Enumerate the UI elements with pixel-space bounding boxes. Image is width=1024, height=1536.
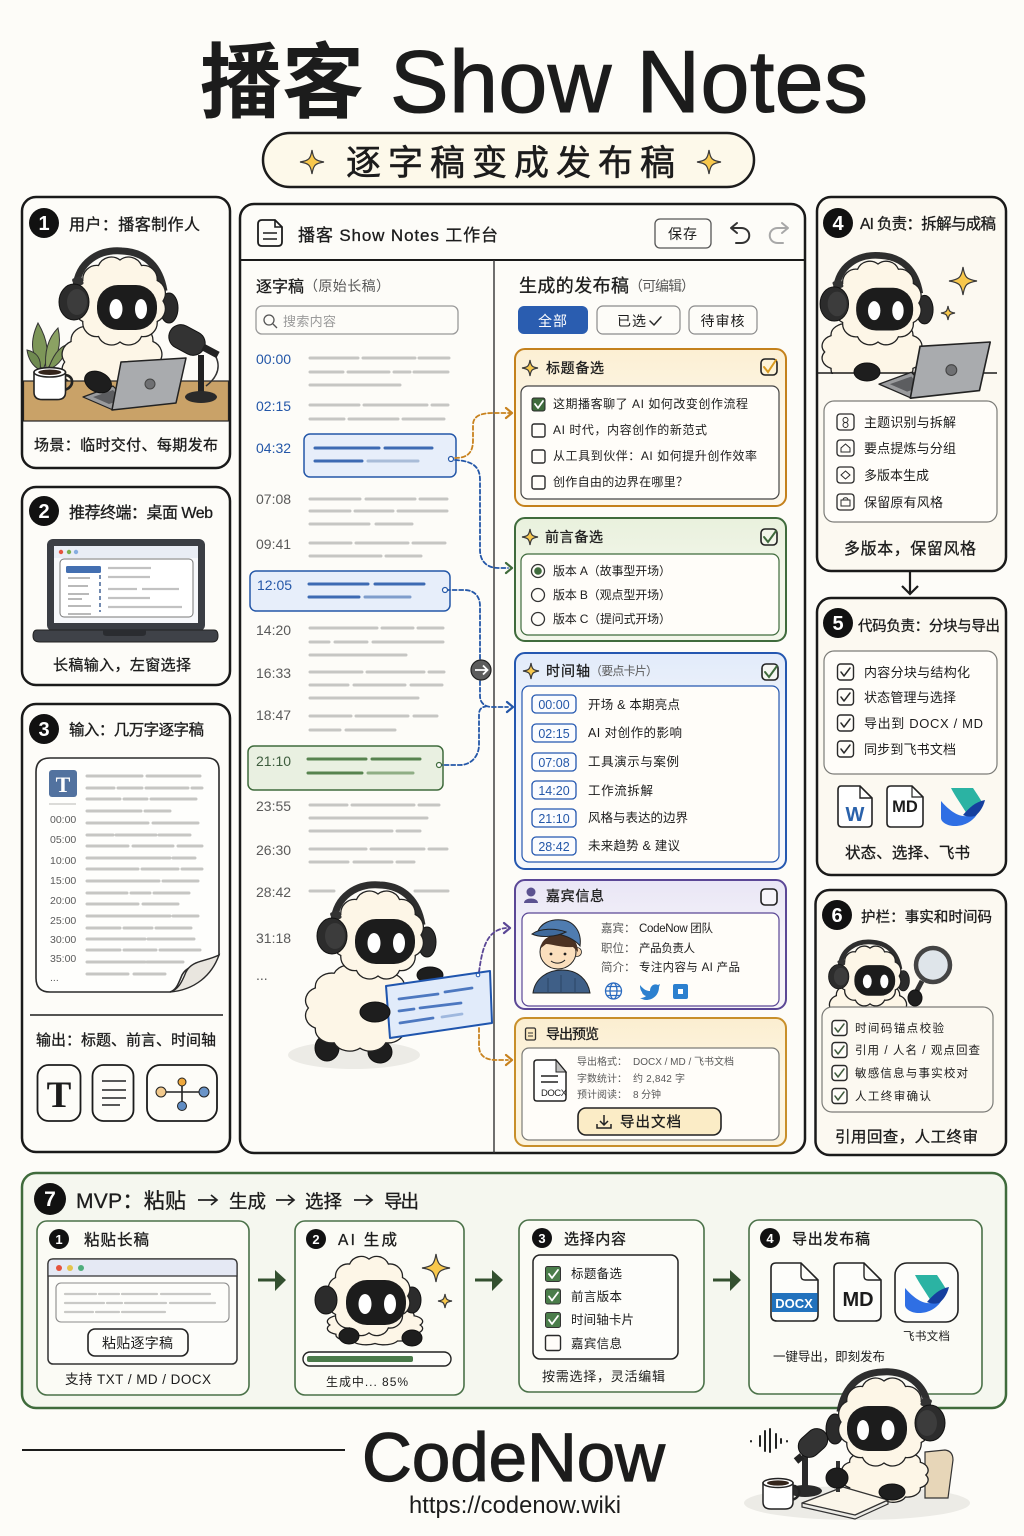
card: timeline key points: 工具演示与案例 xyxy=(588,754,679,769)
icon: plant xyxy=(27,323,66,370)
icon: timeline nodes xyxy=(147,1065,217,1121)
card: guest info: 嘉宾信息 xyxy=(546,888,604,904)
panel 6: guardrails: 6 xyxy=(831,905,843,927)
checklist: 引用 / 人名 / 观点回查 xyxy=(855,1043,980,1057)
panel 6: guardrails xyxy=(816,890,1006,1155)
icon: coffee cup xyxy=(34,368,72,400)
card: export preview: 预计阅读： xyxy=(577,1088,627,1101)
transcript document: 15:00 xyxy=(50,875,76,887)
task list: 要点提炼与分组 xyxy=(864,441,956,456)
checklist: 时间码锚点校验 xyxy=(855,1021,944,1035)
icon: Markdown file xyxy=(887,786,923,827)
card: intro candidates: 版本 B（观点型开场） xyxy=(553,588,671,602)
generated drafts heading xyxy=(519,276,695,296)
icon: export clipboard xyxy=(526,1028,536,1040)
subtitle pill: 逐字稿变成发布稿 xyxy=(346,144,675,183)
panel 3: input and output: 输出：标题、前言、时间轴 xyxy=(36,1032,216,1049)
card: title candidates xyxy=(515,349,786,506)
icon: title T: T xyxy=(47,1075,72,1116)
sparkles xyxy=(422,1254,452,1308)
step 1: paste: 1 xyxy=(55,1232,63,1247)
panel 5: code responsibilities: 状态、选择、飞书 xyxy=(845,844,970,862)
connector: title candidates xyxy=(455,408,512,458)
connector: export xyxy=(479,1028,512,1065)
step 3: select: 3 xyxy=(538,1231,546,1246)
panel 6: guardrails: 护栏：事实和时间码 xyxy=(861,909,992,926)
export button: 导出文档 xyxy=(620,1114,681,1131)
card: guest info: 简介： xyxy=(601,960,636,974)
card: export preview: 8 分钟 xyxy=(633,1088,661,1101)
filter tabs: 全部 xyxy=(538,313,568,329)
step 2: AI generate xyxy=(295,1221,464,1395)
card: timeline key points: 00:00 xyxy=(538,698,570,712)
step 2: AI generate: AI 生成 xyxy=(338,1231,397,1249)
time codes: 04:32 xyxy=(256,440,291,456)
card: title candidates: 创作自由的边界在哪里？ xyxy=(553,474,688,489)
step 2: AI generate: 生成中... 85% xyxy=(326,1374,408,1389)
icon: coffee cup xyxy=(763,1478,799,1509)
pen and paws xyxy=(826,1461,905,1500)
transcript document: 10:00 xyxy=(50,855,76,867)
checklist xyxy=(822,1007,993,1112)
time codes: 09:41 xyxy=(256,536,291,552)
card: timeline key points xyxy=(515,653,786,869)
transcript document: 25:00 xyxy=(50,915,76,927)
checklist: 状态管理与选择 xyxy=(864,690,956,705)
sheep body xyxy=(62,318,162,406)
card: guest info: 嘉宾： xyxy=(601,921,636,935)
step 4: export: 导出发布稿 xyxy=(792,1231,870,1248)
task list: 保留原有风格 xyxy=(864,495,943,510)
icon: title T xyxy=(38,1065,80,1121)
browser window: 粘贴逐字稿 xyxy=(102,1335,173,1351)
card: timeline key points: 风格与表达的边界 xyxy=(588,810,688,825)
checklist: 导出到 DOCX / MD xyxy=(864,716,983,731)
workspace header: 保存 xyxy=(668,226,698,242)
panel 2: device: 2 xyxy=(38,501,50,523)
browser window xyxy=(48,1259,237,1364)
transcript document: T xyxy=(56,772,71,797)
task list xyxy=(824,401,997,522)
footer sheep podcaster xyxy=(744,1372,970,1520)
transcript document: 35:00 xyxy=(50,953,76,965)
card: timeline key points: AI 对创作的影响 xyxy=(588,725,682,740)
highlight segment 12:05: 12:05 xyxy=(257,577,292,593)
task list: 多版本生成 xyxy=(864,468,929,483)
step 3: select xyxy=(519,1220,704,1392)
footer logo: CodeNow xyxy=(362,1419,665,1496)
footer rule xyxy=(22,1449,345,1451)
panel 4: AI responsibilities: 多版本，保留风格 xyxy=(844,540,976,558)
time codes: 00:00 xyxy=(256,351,291,367)
transcript document: 05:00 xyxy=(50,834,76,846)
time codes: 16:33 xyxy=(256,665,291,681)
card: guest info: 产品负责人 xyxy=(639,941,696,955)
title: Show Notes xyxy=(390,32,868,131)
connector: guest xyxy=(479,923,510,972)
card: guest info xyxy=(515,880,786,1009)
step 1: paste: 粘贴长稿 xyxy=(84,1231,149,1249)
flow heading: 生成 xyxy=(229,1191,266,1212)
panel 2: device: 推荐终端：桌面 Web xyxy=(69,504,213,522)
panel 1: user: 1 xyxy=(38,213,50,235)
flow heading: 选择 xyxy=(305,1191,342,1212)
step 4: export: 一键导出，即刻发布 xyxy=(773,1349,885,1364)
transcript column: （原始长稿） xyxy=(304,278,390,294)
step 4: export xyxy=(749,1220,982,1394)
export button xyxy=(578,1108,721,1135)
checklist: 敏感信息与事实校对 xyxy=(855,1066,968,1080)
panel 2: device xyxy=(22,487,230,685)
card: timeline key points: （要点卡片） xyxy=(590,664,658,678)
sheep paw xyxy=(81,367,115,397)
card: guest info: CodeNow 团队 xyxy=(639,921,714,935)
transcript lines xyxy=(310,358,449,891)
card: export preview: 约 2,842 字 xyxy=(633,1072,685,1085)
icon: square link xyxy=(673,984,688,999)
panel 3: input and output: 3 xyxy=(38,719,50,741)
transcript document: ... xyxy=(50,972,59,984)
step 3: select: 前言版本 xyxy=(571,1289,622,1304)
card: timeline key points: 02:15 xyxy=(538,727,570,741)
step 1: paste xyxy=(37,1221,249,1395)
laptop xyxy=(83,358,186,410)
card: intro candidates xyxy=(515,518,786,641)
panel 1: user: 用户：播客制作人 xyxy=(69,216,200,234)
checklist: 内容分块与结构化 xyxy=(864,665,970,680)
search box: 搜索内容 xyxy=(283,314,336,329)
card: timeline key points: 工作流拆解 xyxy=(588,783,653,798)
panel 5: code responsibilities: 代码负责：分块与导出 xyxy=(858,618,1000,635)
arrow: panel 4 to panel 5 xyxy=(902,572,918,594)
main workspace panel xyxy=(240,204,805,1153)
checklist: 同步到飞书文档 xyxy=(864,742,956,757)
card: title candidates: 这期播客聊了 AI 如何改变创作流程 xyxy=(553,396,748,411)
time codes: 18:47 xyxy=(256,707,291,723)
microphone xyxy=(165,320,218,403)
connector: timeline xyxy=(436,588,513,768)
icon: person xyxy=(524,888,538,903)
highlight segment 21:10 xyxy=(248,746,443,790)
icon: MD file: MD xyxy=(842,1289,874,1311)
transcript column xyxy=(248,278,458,983)
flow heading: MVP：粘贴 xyxy=(76,1190,186,1213)
chair xyxy=(925,1450,953,1498)
step 3: select: 时间轴卡片 xyxy=(571,1312,634,1327)
time codes xyxy=(256,351,291,983)
icon: DOCX file xyxy=(771,1263,818,1321)
highlight segment 04:32 xyxy=(304,434,456,477)
time codes: 23:55 xyxy=(256,798,291,814)
panel 1: user: 场景：临时交付、每期发布 xyxy=(34,436,218,454)
time codes: 28:42 xyxy=(256,884,291,900)
arrow xyxy=(475,1270,503,1291)
panel 6: guardrails: 引用回查，人工终审 xyxy=(835,1128,978,1146)
card: guest info: 专注内容与 AI 产品 xyxy=(639,960,740,974)
filter tabs: 待审核 xyxy=(700,313,746,329)
panel 3: input and output: 输入：几万字逐字稿 xyxy=(69,721,204,739)
workspace header xyxy=(240,219,805,260)
highlight segment 21:10: 21:10 xyxy=(256,753,291,769)
notebook xyxy=(802,1487,888,1519)
generated drafts heading: （可编辑） xyxy=(629,278,695,294)
card: export preview xyxy=(515,1018,786,1146)
arrow xyxy=(258,1270,286,1291)
icon: MD file xyxy=(834,1263,881,1321)
footer logo: https://codenow.wiki xyxy=(409,1493,621,1519)
search box xyxy=(256,306,458,334)
icon: Word file xyxy=(838,786,872,827)
icon: Markdown file: MD xyxy=(892,798,918,816)
card: timeline key points: 28:42 xyxy=(538,840,570,854)
card: guest info: 职位： xyxy=(601,941,636,955)
step 1: paste: 支持 TXT / MD / DOCX xyxy=(65,1372,211,1387)
panel 1: user xyxy=(22,197,230,468)
card: timeline key points: 21:10 xyxy=(538,812,570,826)
icon: globe xyxy=(606,983,622,999)
flow heading xyxy=(76,1190,419,1213)
card: timeline key points: 时间轴 xyxy=(546,663,590,679)
card: export preview: DOCX / MD / 飞书文档 xyxy=(633,1055,734,1068)
sparkles xyxy=(941,267,977,320)
transcript document: 00:00 xyxy=(50,814,76,826)
icon: text lines xyxy=(92,1065,134,1121)
progress bar xyxy=(303,1352,451,1366)
time codes: 31:18 xyxy=(256,930,291,946)
sheep head with headphones xyxy=(59,251,178,345)
time codes: 07:08 xyxy=(256,491,291,507)
card: export preview: 导出预览 xyxy=(546,1026,599,1042)
card: title candidates: 标题备选 xyxy=(546,360,604,376)
sheep working xyxy=(315,1256,423,1346)
card: export preview: 导出格式： xyxy=(577,1055,627,1068)
card: timeline key points: 开场 & 本期亮点 xyxy=(588,697,680,712)
panel 2: device: 长稿输入，左窗选择 xyxy=(53,656,191,674)
panel 3: input and output xyxy=(22,704,230,1152)
microphone xyxy=(788,1424,832,1497)
transcript document: 30:00 xyxy=(50,934,76,946)
sheep at laptop xyxy=(818,255,997,398)
panel 7: MVP flow xyxy=(22,1173,1006,1408)
task list: 主题识别与拆解 xyxy=(864,415,956,430)
filter tabs: 已选 xyxy=(617,313,647,329)
panel 5: code responsibilities xyxy=(817,598,1006,875)
panel 7: MVP flow: 7 xyxy=(44,1188,56,1211)
title: 播客 xyxy=(200,38,364,129)
icon: DOCX file xyxy=(534,1060,568,1101)
step 3: select: 嘉宾信息 xyxy=(571,1336,622,1351)
icon: twitter xyxy=(640,984,660,1000)
step 2: AI generate: 2 xyxy=(312,1232,320,1247)
highlight segment 12:05 xyxy=(250,571,450,611)
panel 5: code responsibilities: 5 xyxy=(832,613,844,635)
sheep holding note card xyxy=(288,885,492,1069)
icon: Feishu logo xyxy=(941,788,985,826)
flow heading: 导出 xyxy=(384,1191,419,1212)
checklist xyxy=(824,651,997,774)
card: timeline key points: 07:08 xyxy=(538,756,570,770)
transcript column: 逐字稿 xyxy=(256,278,304,296)
desk xyxy=(24,381,228,421)
subtitle pill xyxy=(263,133,754,187)
step 4: export: 飞书文档 xyxy=(903,1329,950,1343)
step 3: select: 按需选择，灵活编辑 xyxy=(542,1369,665,1384)
card: title candidates: AI 时代，内容创作的新范式 xyxy=(553,422,707,437)
step 3: select: 标题备选 xyxy=(571,1267,622,1281)
time codes: 14:20 xyxy=(256,622,291,638)
transcript document: 20:00 xyxy=(50,895,76,907)
laptop mockup xyxy=(33,539,218,642)
card: timeline key points: 14:20 xyxy=(538,784,570,798)
note card xyxy=(386,971,492,1038)
generated drafts heading: 生成的发布稿 xyxy=(519,276,629,296)
panel 4: AI responsibilities xyxy=(817,197,1006,571)
workspace header: 播客 Show Notes 工作台 xyxy=(298,226,498,245)
panel 4: AI responsibilities: 4 xyxy=(832,213,844,235)
time codes: ... xyxy=(256,967,268,983)
card: intro candidates: 版本 C（提问式开场） xyxy=(553,611,671,626)
time codes: 26:30 xyxy=(256,842,291,858)
arrow xyxy=(713,1270,741,1291)
card: intro candidates: 版本 A（故事型开场） xyxy=(553,563,671,578)
card: timeline key points: 未来趋势 & 建议 xyxy=(588,838,680,853)
connector: intro candidates xyxy=(448,456,512,573)
icon: Word file: W xyxy=(846,804,865,826)
guest avatar xyxy=(532,920,590,993)
sound wave xyxy=(751,1429,787,1452)
icon: Feishu doc xyxy=(895,1263,958,1322)
card: title candidates: 从工具到伙伴：AI 如何提升创作效率 xyxy=(553,448,757,463)
panel 4: AI responsibilities: AI 负责：拆解与成稿 xyxy=(860,215,996,233)
step 4: export: 4 xyxy=(766,1231,774,1246)
icon: DOCX file: DOCX xyxy=(775,1296,813,1311)
card: intro candidates: 前言备选 xyxy=(545,529,603,545)
transcript document xyxy=(36,758,219,992)
card: export preview: 字数统计： xyxy=(577,1072,627,1085)
checklist: 人工终审确认 xyxy=(855,1089,932,1103)
sheep with magnifier xyxy=(829,942,950,1041)
icon: DOCX file: DOCX xyxy=(541,1088,568,1099)
filter tabs xyxy=(518,306,757,334)
time codes: 02:15 xyxy=(256,398,291,414)
step 3: select: 选择内容 xyxy=(564,1231,626,1248)
